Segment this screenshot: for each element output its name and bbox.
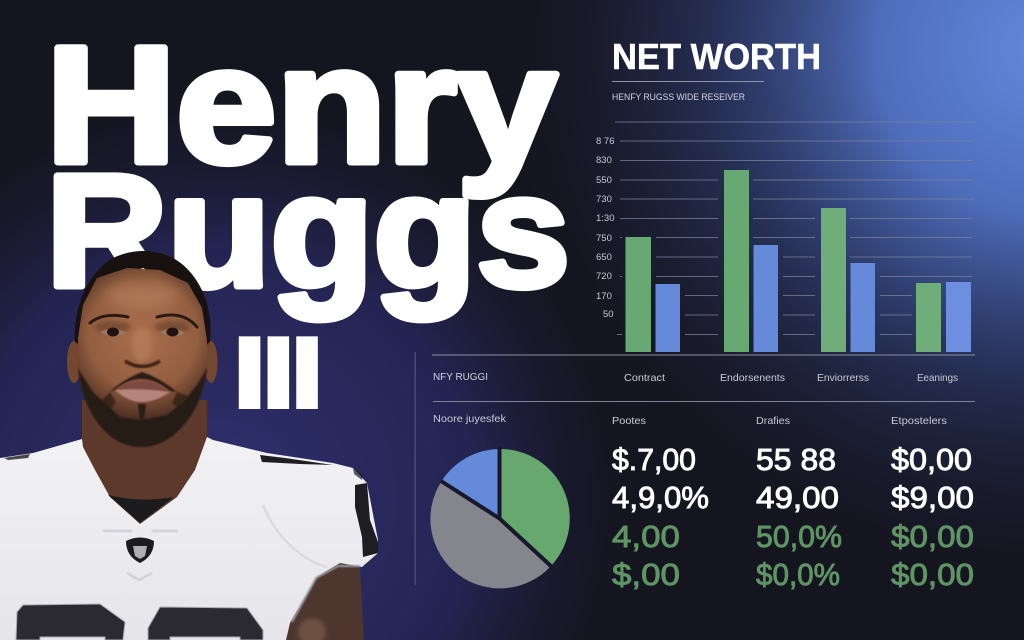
table column headers: Pootes — [612, 415, 646, 427]
eyebrows — [90, 315, 197, 327]
bars: contract — [626, 237, 680, 352]
pie slice: blue — [441, 449, 500, 518]
pie slice gaps — [441, 447, 553, 568]
axis labels: 750 — [596, 233, 612, 244]
table divider — [433, 401, 975, 402]
title suffix: III: III — [236, 320, 323, 425]
lips — [115, 381, 170, 402]
axis labels — [596, 136, 614, 320]
axis labels: 720 — [596, 271, 612, 282]
table values: column 3: $0,00 — [891, 442, 972, 477]
chart category labels: Enviorrerss — [817, 372, 869, 384]
panel divider vertical — [414, 352, 416, 585]
pie caption: Noore juyesfek — [433, 414, 507, 425]
hair — [75, 251, 211, 345]
heading underline — [612, 81, 764, 82]
neck — [82, 400, 207, 532]
nose — [125, 328, 160, 366]
axis labels: 730 — [596, 194, 612, 205]
eye sockets shading — [95, 321, 190, 333]
table values: column 3: $9,00 — [891, 480, 974, 515]
bar chart — [596, 122, 973, 352]
chart category labels — [624, 372, 958, 384]
axis labels: 650 — [596, 252, 612, 263]
table values: column 3 — [891, 442, 974, 592]
jersey numbers — [16, 604, 263, 640]
table values: column 1 — [612, 442, 709, 592]
player portrait — [0, 251, 378, 640]
axis labels: 830 — [596, 155, 612, 166]
sleeve stripes — [4, 454, 378, 557]
chart category labels: Contract — [624, 372, 665, 384]
jersey shading — [103, 505, 360, 622]
table values: column 1: $.7,00 — [612, 442, 696, 477]
axis labels: 170 — [596, 291, 612, 302]
pie slice: grey — [430, 482, 551, 588]
title: Henry Ruggs: Ruggs — [46, 141, 570, 320]
table column headers — [612, 415, 947, 427]
chart baseline — [432, 354, 975, 356]
table values: column 3: $0,00 — [891, 557, 974, 592]
chart category labels: Endorsenents — [720, 372, 785, 384]
face — [78, 268, 207, 447]
axis labels: 1:30 — [596, 213, 614, 224]
table values: column 2: 49,00 — [756, 480, 839, 515]
bars: endorsements — [724, 170, 778, 352]
jersey — [0, 437, 378, 640]
row label: NFY RUGGI — [433, 372, 488, 383]
team shield logo — [126, 538, 154, 563]
axis labels: 8 76 — [596, 136, 614, 147]
bars: earnings — [916, 282, 971, 352]
undershirt — [108, 495, 174, 523]
table values: column 2: 55 88 — [756, 442, 836, 477]
table values: column 2: $0,0% — [756, 557, 840, 592]
eyes — [100, 328, 185, 336]
axis labels: 550 — [596, 175, 612, 186]
table values: column 1: $,00 — [612, 557, 680, 592]
table values: column 1: 4,00 — [612, 519, 680, 554]
net worth heading: NET WORTH — [612, 36, 821, 77]
pie chart — [430, 447, 570, 588]
pie slice: green — [500, 449, 570, 566]
bars: enviorrerss — [821, 208, 875, 352]
title: Henry Ruggs: Henry — [46, 13, 557, 198]
table values: column 3: $0,00 — [891, 519, 974, 554]
table values: column 1: 4,9,0% — [612, 480, 709, 515]
table column headers: Etpostelers — [891, 415, 947, 427]
subtitle: HENFY RUGSS WIDE RESEIVER — [612, 92, 745, 102]
title: Henry Ruggs — [46, 13, 570, 320]
table values: column 2: 50,0% — [756, 519, 842, 554]
axis labels: 50 — [603, 309, 614, 320]
forehead highlight — [106, 284, 178, 308]
moustache and soul patch — [100, 372, 188, 419]
beard — [78, 368, 207, 447]
table values: column 2 — [756, 442, 842, 592]
table column headers: Drafies — [756, 415, 790, 427]
arm with tattoo — [275, 560, 364, 640]
chart category labels: Eeanings — [917, 372, 958, 384]
ears — [67, 341, 218, 383]
